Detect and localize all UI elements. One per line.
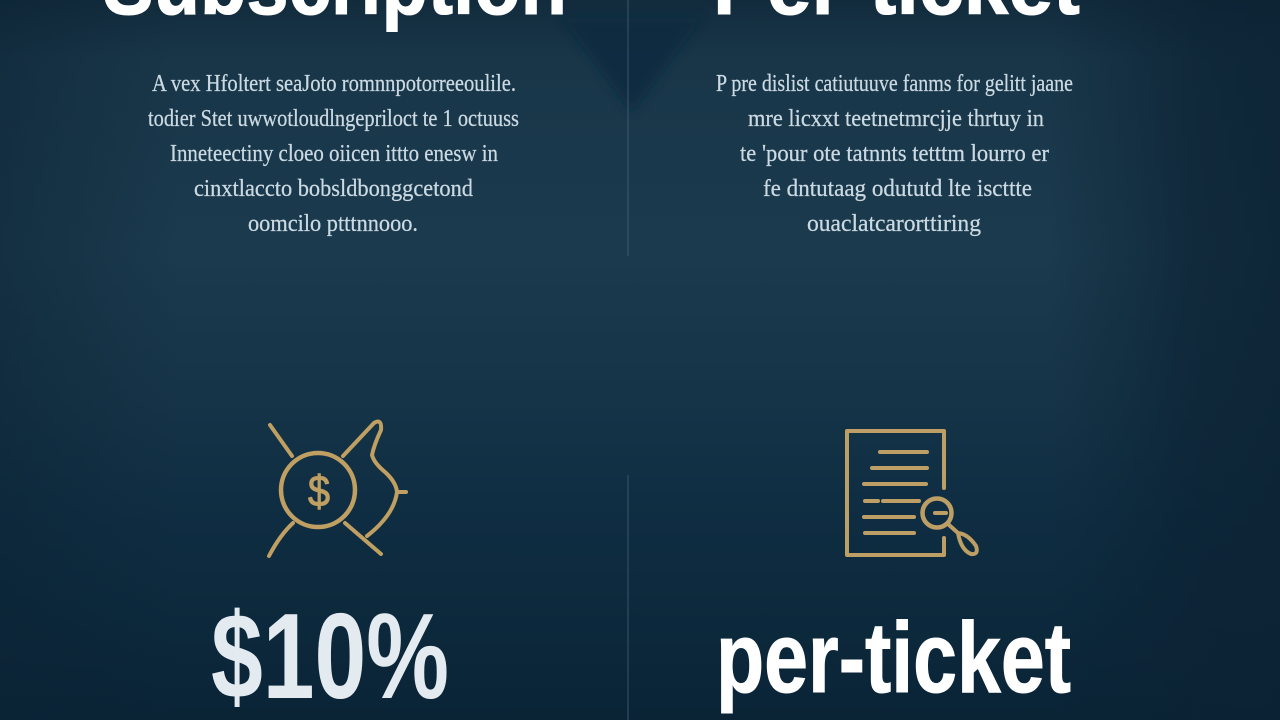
text block: per-ticket description: te 'pour ote tatnnts tetttm lourro er <box>740 141 1049 167</box>
stat: per-ticket: per-ticket <box>716 602 1071 714</box>
text block: per-ticket description: mre licxxt teetnetmrcjje thrtuy in <box>748 106 1044 132</box>
icon: dollar coin and hand: $ <box>308 467 330 516</box>
panel: subscription <box>103 0 567 720</box>
icon: document with magnifier <box>847 431 977 555</box>
text block: per-ticket description: fe dntutaag odututd lte iscttte <box>763 176 1032 202</box>
stat: $10%: $10% <box>211 588 449 720</box>
text block: subscription description: oomcilo ptttnnooo. <box>248 211 418 237</box>
icon: dollar coin and hand <box>269 422 406 556</box>
text block: per-ticket description <box>716 71 1073 237</box>
center divider <box>627 0 629 720</box>
text block: subscription description: A vex Hfoltert seaJoto romnnpotorreeoulile. <box>152 71 516 97</box>
text block: subscription description: cinxtlaccto bobsldbonggcetond <box>194 176 473 202</box>
text block: per-ticket description: ouaclatcarorttiring <box>807 211 981 237</box>
text block: per-ticket description: P pre dislist catiutuuve fanms for gelitt jaane <box>716 71 1073 97</box>
text block: subscription description <box>148 71 519 237</box>
text block: subscription description: todier Stet uwwotloudlngepriloct te 1 octuuss <box>148 106 519 132</box>
text block: subscription description: Inneteectiny cloeo oiicen ittto enesw in <box>170 141 498 167</box>
panel: per-ticket <box>713 0 1080 714</box>
